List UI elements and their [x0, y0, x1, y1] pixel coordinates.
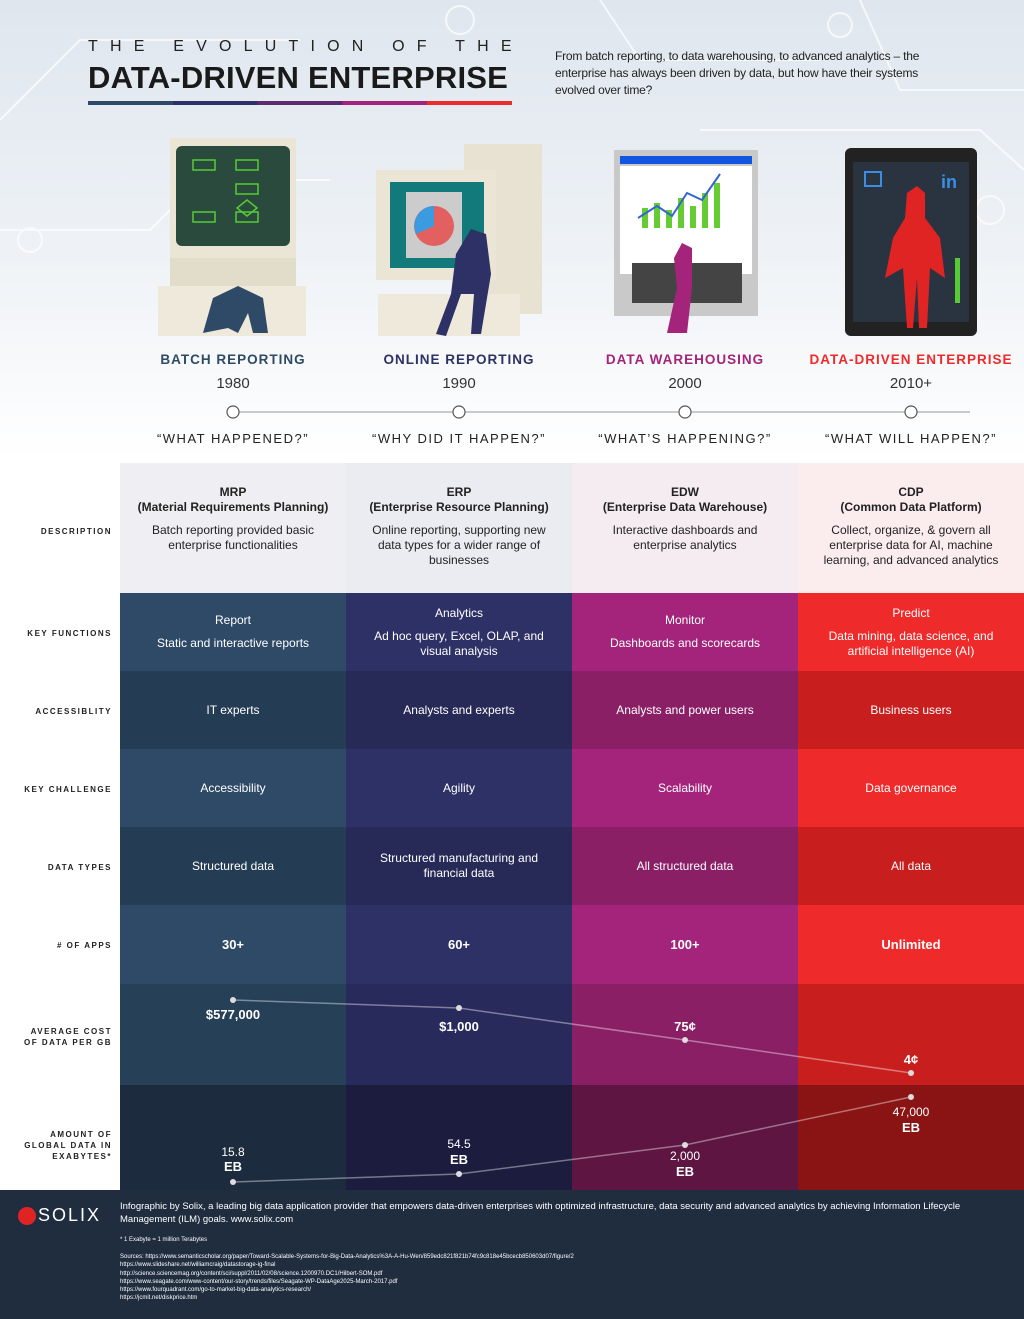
- footer: [0, 1190, 1024, 1319]
- footer: Sources: https://www.semanticscholar.org/paper/Toward-Scalable-Systems-for-Big-Data-Analytics%3A-A-Hu-Wen/859edc821f821b74fc9c818e45bcecb850603d07/figure/2: [120, 1254, 574, 1260]
- text: OF DATA PER GB: [24, 1038, 112, 1047]
- table: description row: (Material Requirements Planning): [138, 500, 328, 514]
- illustration: online computer: [376, 144, 542, 336]
- line chart: cost and data amount: EB: [676, 1164, 694, 1179]
- table: apps: [120, 905, 346, 984]
- text: ONLINE REPORTING: [383, 352, 534, 367]
- text: Analysts and power users: [616, 702, 754, 716]
- text: “WHAT’S HAPPENING?”: [598, 431, 772, 446]
- header background: [0, 0, 1024, 460]
- text: Interactive dashboards and enterprise analytics: [613, 523, 757, 552]
- text: Business users: [870, 702, 952, 716]
- text: (Enterprise Data Warehouse): [603, 500, 767, 514]
- text: Online reporting, supporting new data types for a wider range of businesses: [372, 523, 546, 567]
- line chart: cost and data amount: EB: [902, 1120, 920, 1135]
- line chart: cost and data amount: 47,000: [893, 1105, 930, 1119]
- footer: https://www.fourquadrant.com/go-to-market-big-data-analytics-research/: [120, 1287, 311, 1293]
- table: description row: [120, 463, 346, 593]
- table: key functions: [120, 593, 346, 671]
- illustration: tablet: in: [941, 172, 957, 192]
- row labels: DESCRIPTION: [41, 527, 112, 536]
- text: Data mining, data science, and artificial intelligence (AI): [829, 628, 993, 658]
- table: key challenge: [120, 749, 346, 827]
- text: DATA WAREHOUSING: [606, 352, 764, 367]
- table: apps: 30+: [222, 937, 244, 952]
- text: All structured data: [637, 858, 733, 872]
- text: Collect, organize, & govern all enterprise data for AI, machine learning, and advanced analytics: [824, 523, 998, 567]
- line chart: cost and data amount: EB: [224, 1159, 242, 1174]
- title: THE EVOLUTION OF THE: [88, 38, 524, 55]
- table: key challenge: Accessibility: [200, 780, 266, 794]
- text: Ad hoc query, Excel, OLAP, and visual analysis: [374, 628, 544, 658]
- text: (Enterprise Resource Planning): [369, 500, 549, 514]
- table: key functions: Static and interactive reports: [157, 636, 309, 650]
- text: Unlimited: [881, 937, 941, 952]
- footer: * 1 Exabyte = 1 million Terabytes: [120, 1237, 207, 1243]
- illustration: laptop: [614, 150, 758, 333]
- text: Agility: [443, 780, 475, 794]
- line chart: cost and data amount: [206, 997, 930, 1185]
- text: 2010+: [890, 375, 932, 392]
- footer: https://jcmit.net/diskprice.htm: [120, 1295, 197, 1301]
- text: # OF APPS: [57, 941, 112, 950]
- line chart: cost and data amount: 4¢: [904, 1052, 918, 1067]
- table: accessibility: IT experts: [206, 702, 260, 716]
- title: DATA-DRIVEN ENTERPRISE: [88, 60, 508, 95]
- text: “WHAT WILL HAPPEN?”: [825, 431, 997, 446]
- footer: http://science.sciencemag.org/content/sci/suppl/2011/02/08/science.1200970.DC1/Hilbert-SOM.pdf: [120, 1271, 382, 1277]
- text: Predict: [892, 606, 930, 620]
- era headings: [160, 352, 306, 392]
- text: 100+: [670, 937, 700, 952]
- text: AMOUNT OF: [50, 1130, 112, 1139]
- footer text: Infographic by Solix, a leading big data application provider that empowers data-driven enterprises with optimized infrastructure, data security and advanced analytics by achieving Information Lifecycle Management (ILM) goals. www.solix.com: [120, 1201, 960, 1225]
- text: KEY FUNCTIONS: [27, 629, 112, 638]
- line chart: cost and data amount: EB: [450, 1152, 468, 1167]
- text: AVERAGE COST: [31, 1027, 112, 1036]
- text: Analytics: [435, 606, 483, 620]
- text: DATA TYPES: [48, 863, 112, 872]
- footer: https://www.slideshare.net/williamcraig/datastorage-ig-final: [120, 1262, 275, 1268]
- text: Analysts and experts: [403, 702, 515, 716]
- text: DATA-DRIVEN ENTERPRISE: [809, 352, 1012, 367]
- era headings: BATCH REPORTING: [160, 352, 306, 367]
- line chart: cost and data amount: 54.5: [447, 1137, 471, 1151]
- footer: https://www.seagate.com/www-content/our-story/trends/files/Seagate-WP-DataAge2025-March-2017.pdf: [120, 1279, 397, 1285]
- text: 2000: [668, 375, 702, 392]
- text: Scalability: [658, 780, 712, 794]
- line chart: cost and data amount: $1,000: [439, 1019, 479, 1034]
- text: All data: [891, 858, 931, 872]
- text: 60+: [448, 937, 470, 952]
- questions: “WHAT HAPPENED?”: [157, 431, 309, 446]
- text: KEY CHALLENGE: [24, 785, 112, 794]
- intro text: From batch reporting, to data warehousing, to advanced analytics – the enterprise has always been driven by data, but how have their systems evolved over time?: [555, 49, 919, 97]
- logo: SOLIX: [38, 1205, 101, 1225]
- text: ERP: [447, 485, 471, 499]
- timeline: [226, 405, 970, 419]
- text: 1990: [442, 375, 476, 392]
- table: description row: MRP: [220, 485, 246, 499]
- table: data types: [120, 827, 346, 905]
- text: (Common Data Platform): [840, 500, 982, 514]
- line chart: cost and data amount: 15.8: [221, 1145, 245, 1159]
- line chart: cost and data amount: 2,000: [670, 1149, 700, 1163]
- table: description row: Batch reporting provided basic enterprise functionalities: [152, 523, 314, 552]
- era headings: 1980: [216, 375, 250, 392]
- table: cost & amount backgrounds: [120, 984, 1024, 1190]
- illustration: batch computer: [158, 138, 306, 336]
- illustration: tablet: [845, 148, 977, 336]
- text: Dashboards and scorecards: [610, 636, 760, 650]
- text: ACCESSIBLITY: [35, 707, 112, 716]
- text: GLOBAL DATA IN: [24, 1141, 112, 1150]
- title: [88, 38, 524, 105]
- text: EDW: [671, 485, 699, 499]
- text: “WHY DID IT HAPPEN?”: [372, 431, 546, 446]
- table: key functions: Report: [215, 613, 251, 627]
- text: Structured manufacturing and financial data: [380, 851, 538, 880]
- table: data types: Structured data: [192, 858, 274, 872]
- line chart: cost and data amount: $577,000: [206, 1007, 260, 1022]
- line chart: cost and data amount: 75¢: [674, 1019, 696, 1034]
- text: Monitor: [665, 613, 705, 627]
- table: accessibility: [120, 671, 346, 749]
- text: CDP: [898, 485, 924, 499]
- text: EXABYTES*: [52, 1152, 112, 1161]
- text: Data governance: [865, 780, 957, 794]
